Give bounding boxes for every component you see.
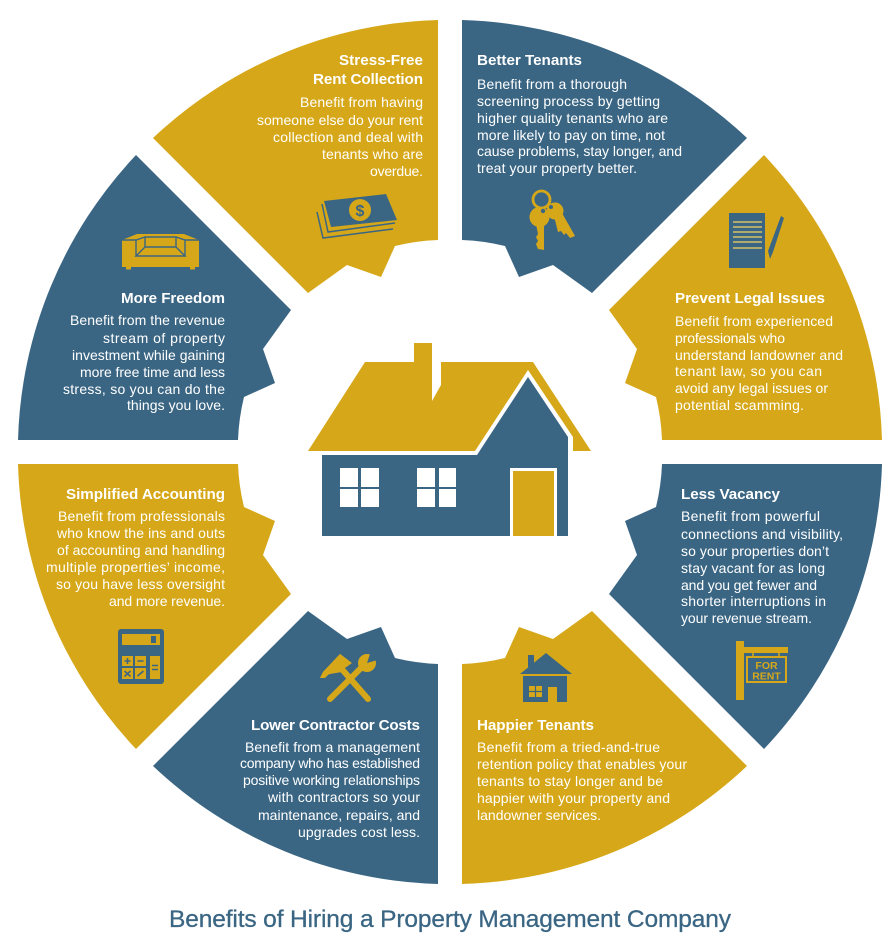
icon: stack of money: $ (356, 203, 365, 220)
segment shape (609, 155, 882, 440)
body text: retention policy that enables your (477, 756, 687, 772)
body text: tenant law, so you can (675, 363, 822, 379)
body text: company who has established (240, 755, 420, 771)
body text: investment while gaining (72, 347, 225, 363)
heading (313, 52, 423, 88)
body text: more free time and less (80, 364, 225, 380)
icon: sofa (122, 234, 199, 270)
body text: someone else do your rent (257, 112, 423, 128)
body text: cause problems, stay longer, and (477, 143, 682, 159)
icon: for rent sign: RENT (752, 670, 781, 682)
body text: avoid any legal issues or (675, 380, 828, 396)
body text: upgrades cost less. (298, 824, 420, 840)
heading: More Freedom (121, 290, 225, 307)
icon: calculator (118, 629, 164, 684)
roof and chimney (308, 343, 591, 451)
body text: Benefit from experienced (675, 313, 833, 329)
heading: Prevent Legal Issues (675, 290, 825, 307)
icon: hammer and wrench (320, 651, 381, 699)
segment shape (18, 155, 291, 440)
body text: stream of property (103, 330, 225, 346)
windows (340, 468, 456, 507)
body text (240, 739, 420, 840)
panel: lower contractor costs (153, 611, 438, 884)
body text: Benefit from a thorough (477, 76, 627, 92)
icon: document and pen (729, 213, 784, 268)
heading: Less Vacancy (681, 486, 781, 503)
body text (46, 508, 225, 609)
panel: simplified accounting (18, 464, 291, 749)
body text: stay vacant for as long (681, 560, 825, 576)
body text: happier with your property and (477, 790, 670, 806)
body text: collection and deal with (273, 129, 423, 145)
house body (322, 377, 568, 536)
panel: happier tenants (462, 611, 747, 884)
body text (63, 312, 225, 413)
body text: shorter interruptions in (681, 593, 826, 609)
icon: small house (520, 653, 572, 702)
body text (477, 739, 687, 823)
body text: things you love. (127, 397, 225, 413)
body text: Benefit from powerful (681, 508, 820, 524)
panel: stress-free rent collection (153, 20, 438, 293)
body text: and more revenue. (109, 593, 225, 609)
body text: and you get fewer and (681, 577, 817, 593)
body text: tenants to stay longer and be (477, 773, 663, 789)
body text: higher quality tenants who are (477, 110, 668, 126)
body text (675, 313, 843, 413)
body text: potential scamming. (675, 397, 804, 413)
body text: so your properties don’t (681, 543, 829, 559)
body text: multiple properties’ income, (46, 559, 225, 575)
segment shape (153, 20, 438, 293)
segment shape (153, 611, 438, 884)
panel: more freedom (18, 155, 291, 440)
body text: maintenance, repairs, and (258, 807, 420, 823)
body text: with contractors so your (267, 789, 420, 805)
body text: connections and visibility, (681, 526, 843, 542)
body text: overdue. (370, 163, 423, 179)
segment shape (18, 464, 291, 749)
segment shape (609, 464, 882, 749)
body text: positive working relationships (243, 772, 420, 788)
panel: prevent legal issues (609, 155, 882, 440)
heading: Lower Contractor Costs (251, 717, 420, 734)
body text: treat your property better. (477, 160, 637, 176)
body text: Benefit from having (300, 94, 423, 110)
heading: Happier Tenants (477, 717, 594, 734)
body text: understand landowner and (675, 347, 843, 363)
body text: landowner services. (477, 807, 601, 823)
icon: keys (530, 191, 575, 250)
icon: for rent sign (736, 641, 788, 700)
heading: Stress-Free (339, 52, 423, 69)
heading: Rent Collection (313, 71, 423, 88)
body text: professionals who (675, 330, 785, 346)
body text (681, 508, 843, 626)
door (510, 468, 557, 536)
body text: Benefit from the revenue (70, 312, 225, 328)
central house illustration (308, 343, 591, 536)
body text: Benefit from a management (245, 739, 420, 755)
body text: stress, so you can do the (63, 381, 225, 397)
body text: tenants who are (322, 146, 423, 162)
body text: your revenue stream. (681, 610, 812, 626)
segment shape (462, 20, 747, 293)
panel: better tenants (462, 20, 747, 293)
segment shape (462, 611, 747, 884)
body text: of accounting and handling (57, 542, 225, 558)
body text (257, 94, 423, 179)
body text: screening process by getting (477, 93, 660, 109)
title: Benefits of Hiring a Property Management Company (169, 906, 732, 933)
body text: so you have less oversight (56, 576, 225, 592)
body text: more likely to pay on time, not (477, 127, 665, 143)
body text: Benefit from professionals (58, 508, 225, 524)
icon: stack of money (317, 194, 397, 238)
icon: for rent sign: FOR (755, 660, 778, 672)
body text (477, 76, 682, 176)
heading: Simplified Accounting (66, 486, 225, 503)
heading: Better Tenants (477, 52, 582, 69)
body text: who know the ins and outs (56, 525, 225, 541)
panel: less vacancy (609, 464, 882, 749)
body text: Benefit from a tried-and-true (477, 739, 660, 755)
